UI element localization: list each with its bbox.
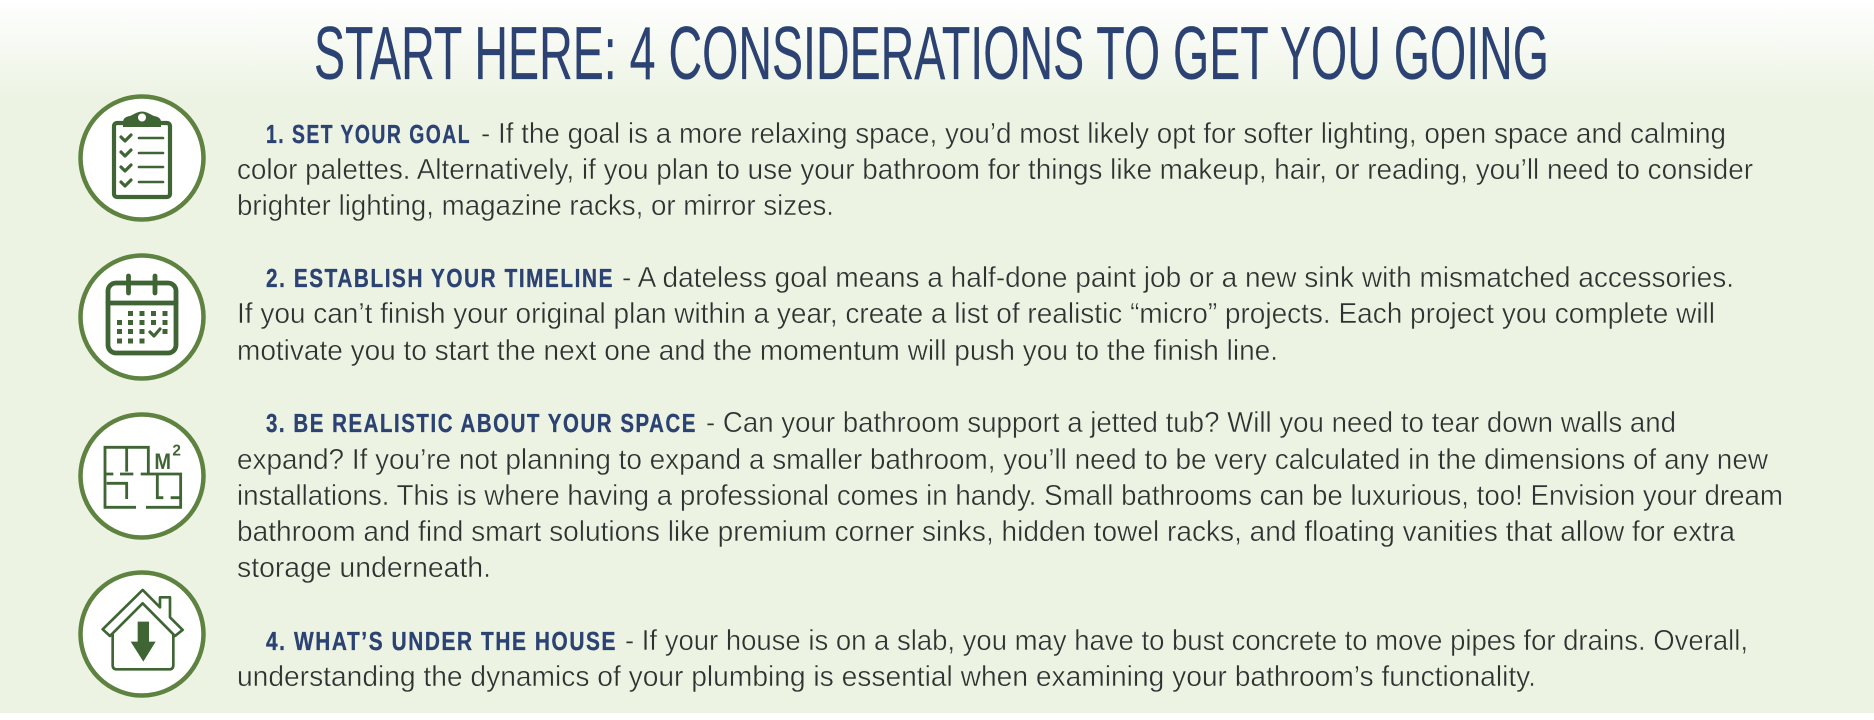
step 3: be realistic about your space [80,407,1783,584]
text: space paragraph: - Can your bathroom support a jetted tub? Will you need to tear down walls and [706,407,1676,439]
text: space paragraph: installations. This is where having a professional comes in handy. Small bathrooms can be luxurious, too! Envision your dream [237,480,1783,512]
text: house paragraph [237,625,1748,693]
text: space paragraph: storage underneath. [237,552,491,584]
step 2: establish your timeline [80,256,1734,378]
text: goal paragraph: color palettes. Alternatively, if you plan to use your bathroom for things like makeup, hair, or reading, you’ll need to consider [237,154,1753,186]
icon: calendar [80,256,204,378]
step 4: what's under the house [80,572,1748,696]
text: goal paragraph: 1. SET YOUR GOAL [266,119,471,149]
text: space paragraph: 3. BE REALISTIC ABOUT YOUR SPACE [266,408,697,438]
text: timeline paragraph: If you can’t finish your original plan within a year, create a list of realistic “micro” projects. Each project you complete will [237,298,1715,330]
text: space paragraph: expand? If you’re not planning to expand a smaller bathroom, you’ll need to be very calculated in the dimensions of any new [237,444,1768,476]
icon: house with down arrow [80,572,204,696]
icon: floor plan with square metres: M [154,449,171,474]
text: house paragraph: 4. WHAT’S UNDER THE HOUSE [266,626,617,656]
text: space paragraph: bathroom and find smart solutions like premium corner sinks, hidden towel racks, and floating vanities that allow for extra [237,516,1735,548]
text: house paragraph: - If your house is on a slab, you may have to bust concrete to move pipes for drains. Overall, [625,625,1748,657]
text: timeline paragraph: motivate you to start the next one and the momentum will push you to the finish line. [237,335,1278,367]
icon: clipboard checklist [80,96,204,220]
icon: floor plan with square metres [80,414,204,538]
icon: floor plan with square metres: 2 [172,442,181,459]
text: timeline paragraph: - A dateless goal means a half-done paint job or a new sink with mismatched accessories. [622,262,1734,294]
text: timeline paragraph [237,262,1734,367]
text: house paragraph: understanding the dynamics of your plumbing is essential when examining your bathroom’s functionality. [237,661,1536,693]
text: space paragraph [237,407,1783,584]
text: goal paragraph [237,118,1753,222]
text: goal paragraph: - If the goal is a more relaxing space, you’d most likely opt for softer lighting, open space and calming [481,118,1726,150]
text: timeline paragraph: 2. ESTABLISH YOUR TIMELINE [266,263,614,293]
step 1: set your goal [80,96,1753,222]
text: goal paragraph: brighter lighting, magazine racks, or mirror sizes. [237,190,834,222]
